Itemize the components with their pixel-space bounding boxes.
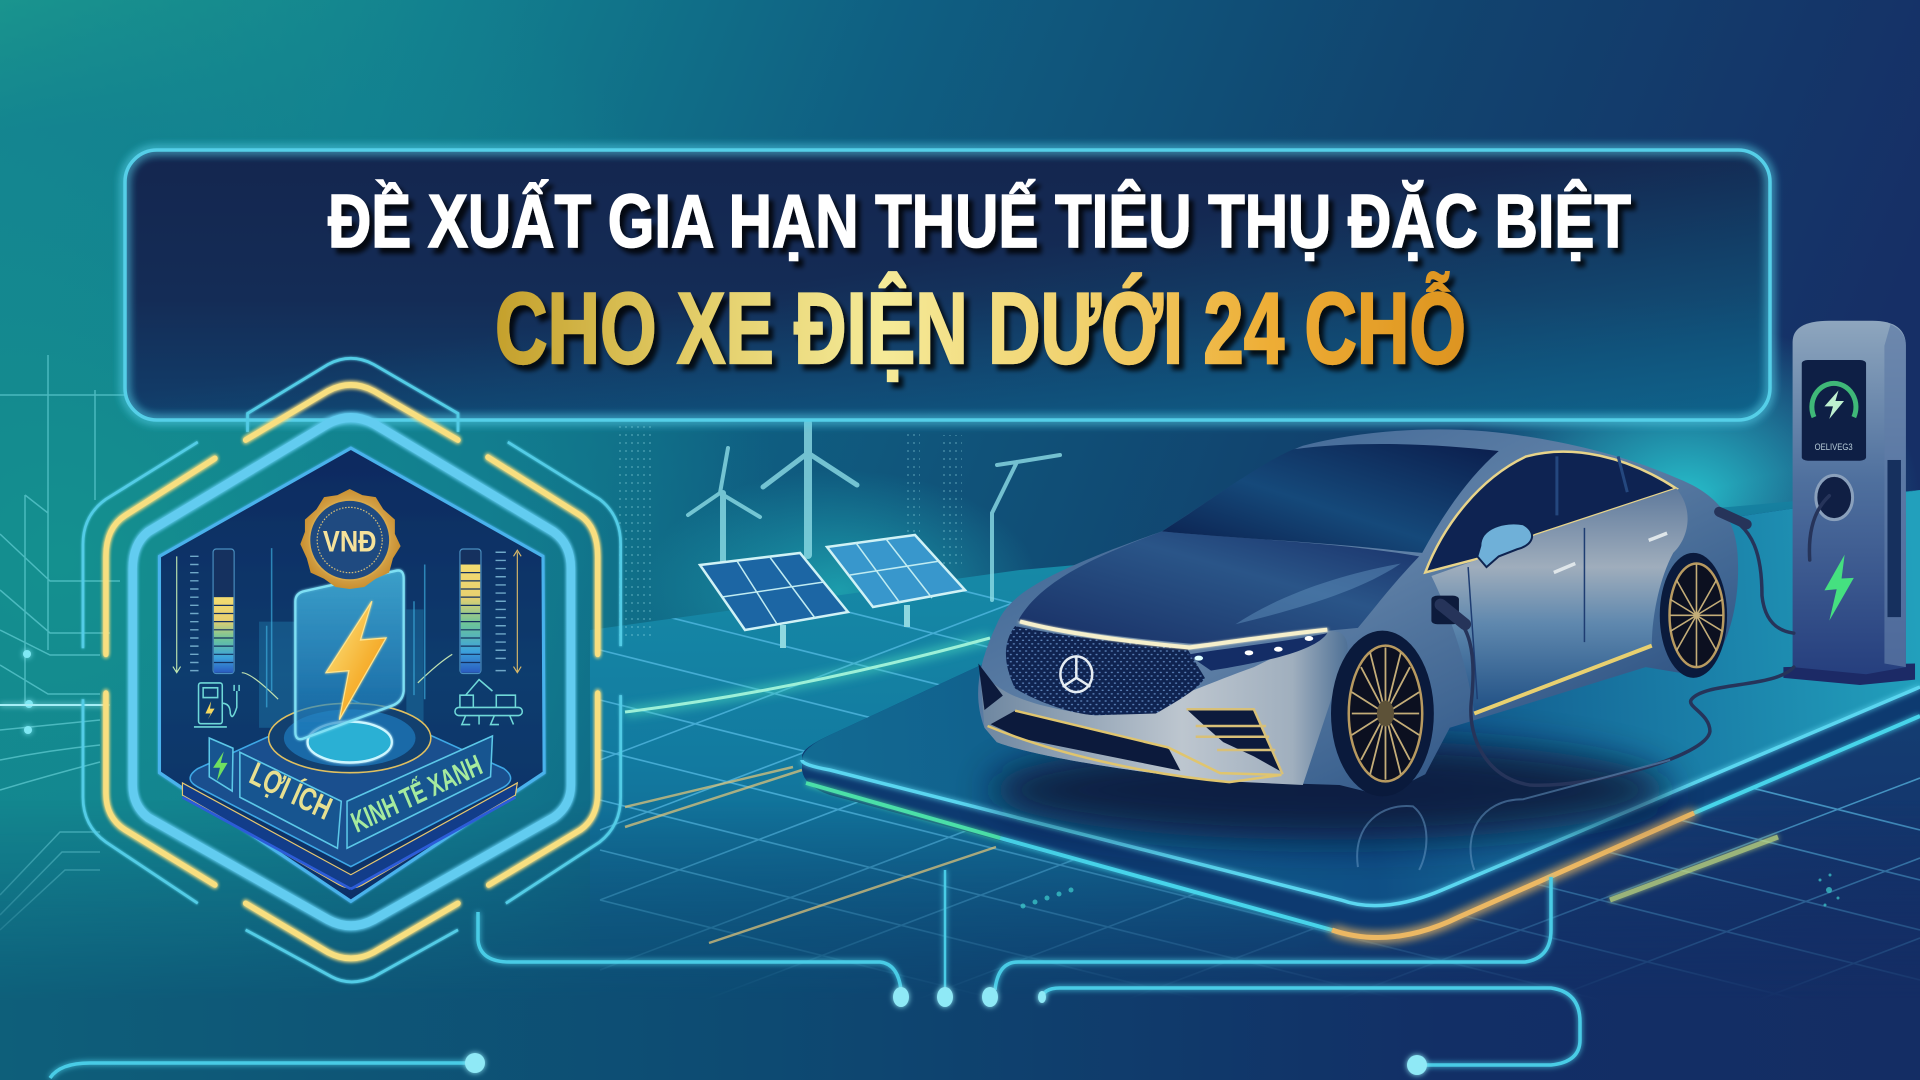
circuit traces — [50, 870, 1580, 1078]
floor glow lines — [625, 638, 1778, 943]
VND coin badge: VNĐ — [323, 526, 376, 559]
front bumper — [980, 631, 1348, 785]
small green bolt tile — [209, 738, 233, 791]
emblem star — [1060, 656, 1092, 692]
door handles — [1554, 533, 1667, 572]
glass tile — [295, 570, 404, 739]
left glow dots — [0, 650, 105, 734]
side windows — [1425, 452, 1676, 572]
left level bar — [173, 549, 234, 673]
panel: Kinh tế xanh: KINH TẾ XANH — [347, 749, 487, 840]
front fog vent — [978, 664, 1003, 710]
charging station: OELIVEG3 — [1815, 441, 1853, 452]
rear wheel — [1660, 553, 1727, 678]
title banner — [125, 150, 1770, 420]
car body — [978, 429, 1738, 796]
windshield — [1162, 444, 1499, 553]
screen gauge — [1812, 383, 1856, 419]
glowing columns — [259, 609, 424, 728]
outer cyan segments — [83, 358, 621, 982]
solar panels — [700, 535, 965, 648]
panel: Kinh tế xanh — [347, 736, 492, 848]
inner dark hexagon — [160, 448, 544, 901]
heading line 1: ĐỀ XUẤT GIA HẠN THUẾ TIÊU THỤ ĐẶC BIỆT — [328, 179, 1631, 263]
charging cable — [1441, 496, 1829, 785]
gold segments — [106, 385, 598, 958]
charge port — [1431, 596, 1459, 624]
grille — [1006, 626, 1205, 715]
data streams — [267, 548, 425, 707]
platform base — [182, 699, 517, 889]
light-blue ring — [133, 418, 571, 926]
charging station — [1783, 321, 1915, 685]
circuit nodes — [465, 987, 1427, 1075]
heading line 2: CHO XE ĐIỆN DƯỚI 24 CHỖ — [495, 273, 1466, 385]
sparkle and floor dots — [1020, 874, 1840, 908]
electric car — [978, 429, 1829, 870]
wind turbines — [688, 423, 1060, 600]
hood highlight — [1235, 564, 1401, 624]
front wheel — [1331, 631, 1434, 796]
door panels — [1431, 489, 1688, 714]
floor surface — [590, 460, 1920, 1080]
headlight — [1188, 633, 1327, 671]
hexagon emblem — [83, 358, 621, 982]
ghost data columns — [618, 425, 962, 640]
charger socket — [1816, 475, 1853, 520]
connector lines — [242, 654, 452, 699]
car reflection — [1357, 760, 1670, 870]
icon: lightning bolt — [326, 601, 386, 720]
left tech circuit lines — [0, 355, 135, 930]
platform under the car — [802, 490, 1920, 938]
LED strip — [1020, 621, 1327, 647]
green bolt — [1824, 555, 1854, 621]
icon: charging pump — [194, 683, 239, 727]
charger screen — [1802, 360, 1866, 461]
bottom solid strip — [0, 800, 1920, 1080]
hood — [1018, 531, 1419, 644]
gold sill — [1474, 646, 1652, 714]
side mirror — [1477, 523, 1532, 567]
icon: factory conveyor — [455, 680, 522, 725]
lower air intake — [988, 711, 1281, 782]
floor grid lines — [600, 591, 1920, 984]
car shadow — [990, 740, 1670, 840]
panel: Lợi ích: LỢI ÍCH — [245, 755, 337, 827]
side air intake — [1187, 709, 1283, 774]
right level bar — [460, 549, 521, 673]
VND coin badge — [300, 489, 401, 589]
